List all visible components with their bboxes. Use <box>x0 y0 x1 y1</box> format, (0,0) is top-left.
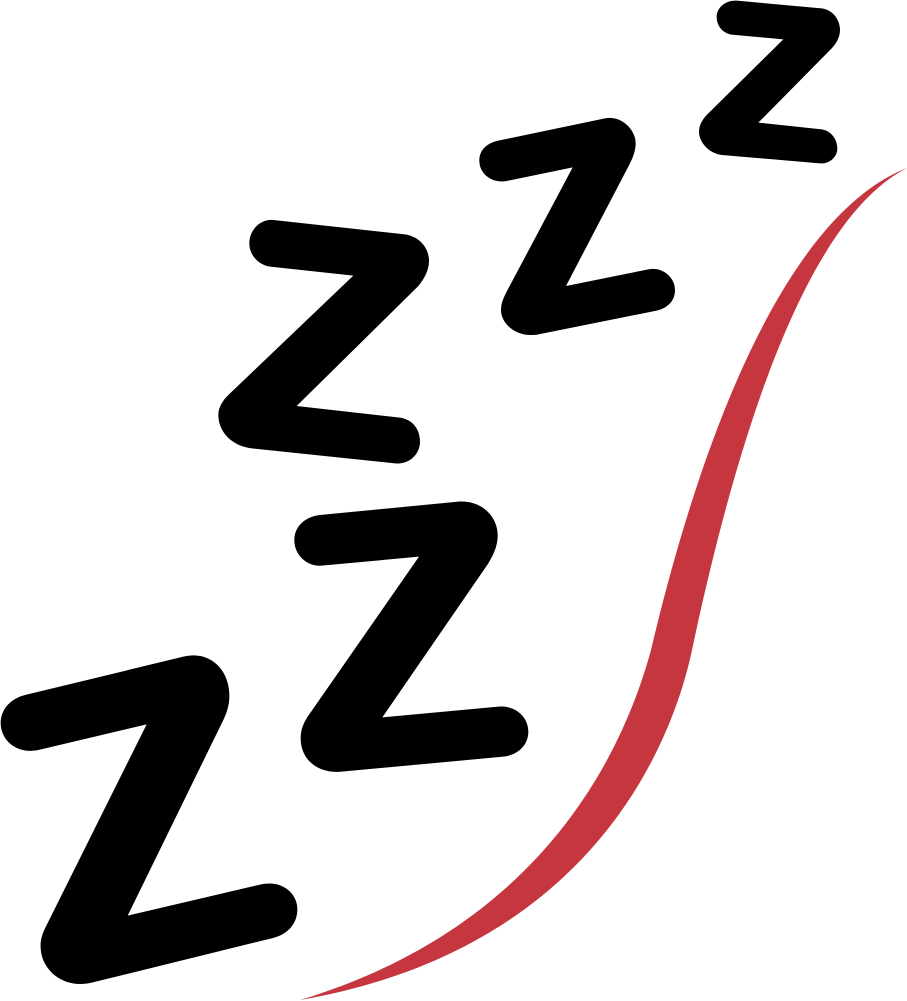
icon: top-right small Z <box>699 1 840 163</box>
icon: second Z <box>294 502 528 772</box>
icon: third Z <box>218 220 429 464</box>
icon: red swoosh <box>300 168 907 1000</box>
icon: fourth Z <box>479 118 675 335</box>
icon: large bottom-left Z <box>1 655 297 984</box>
